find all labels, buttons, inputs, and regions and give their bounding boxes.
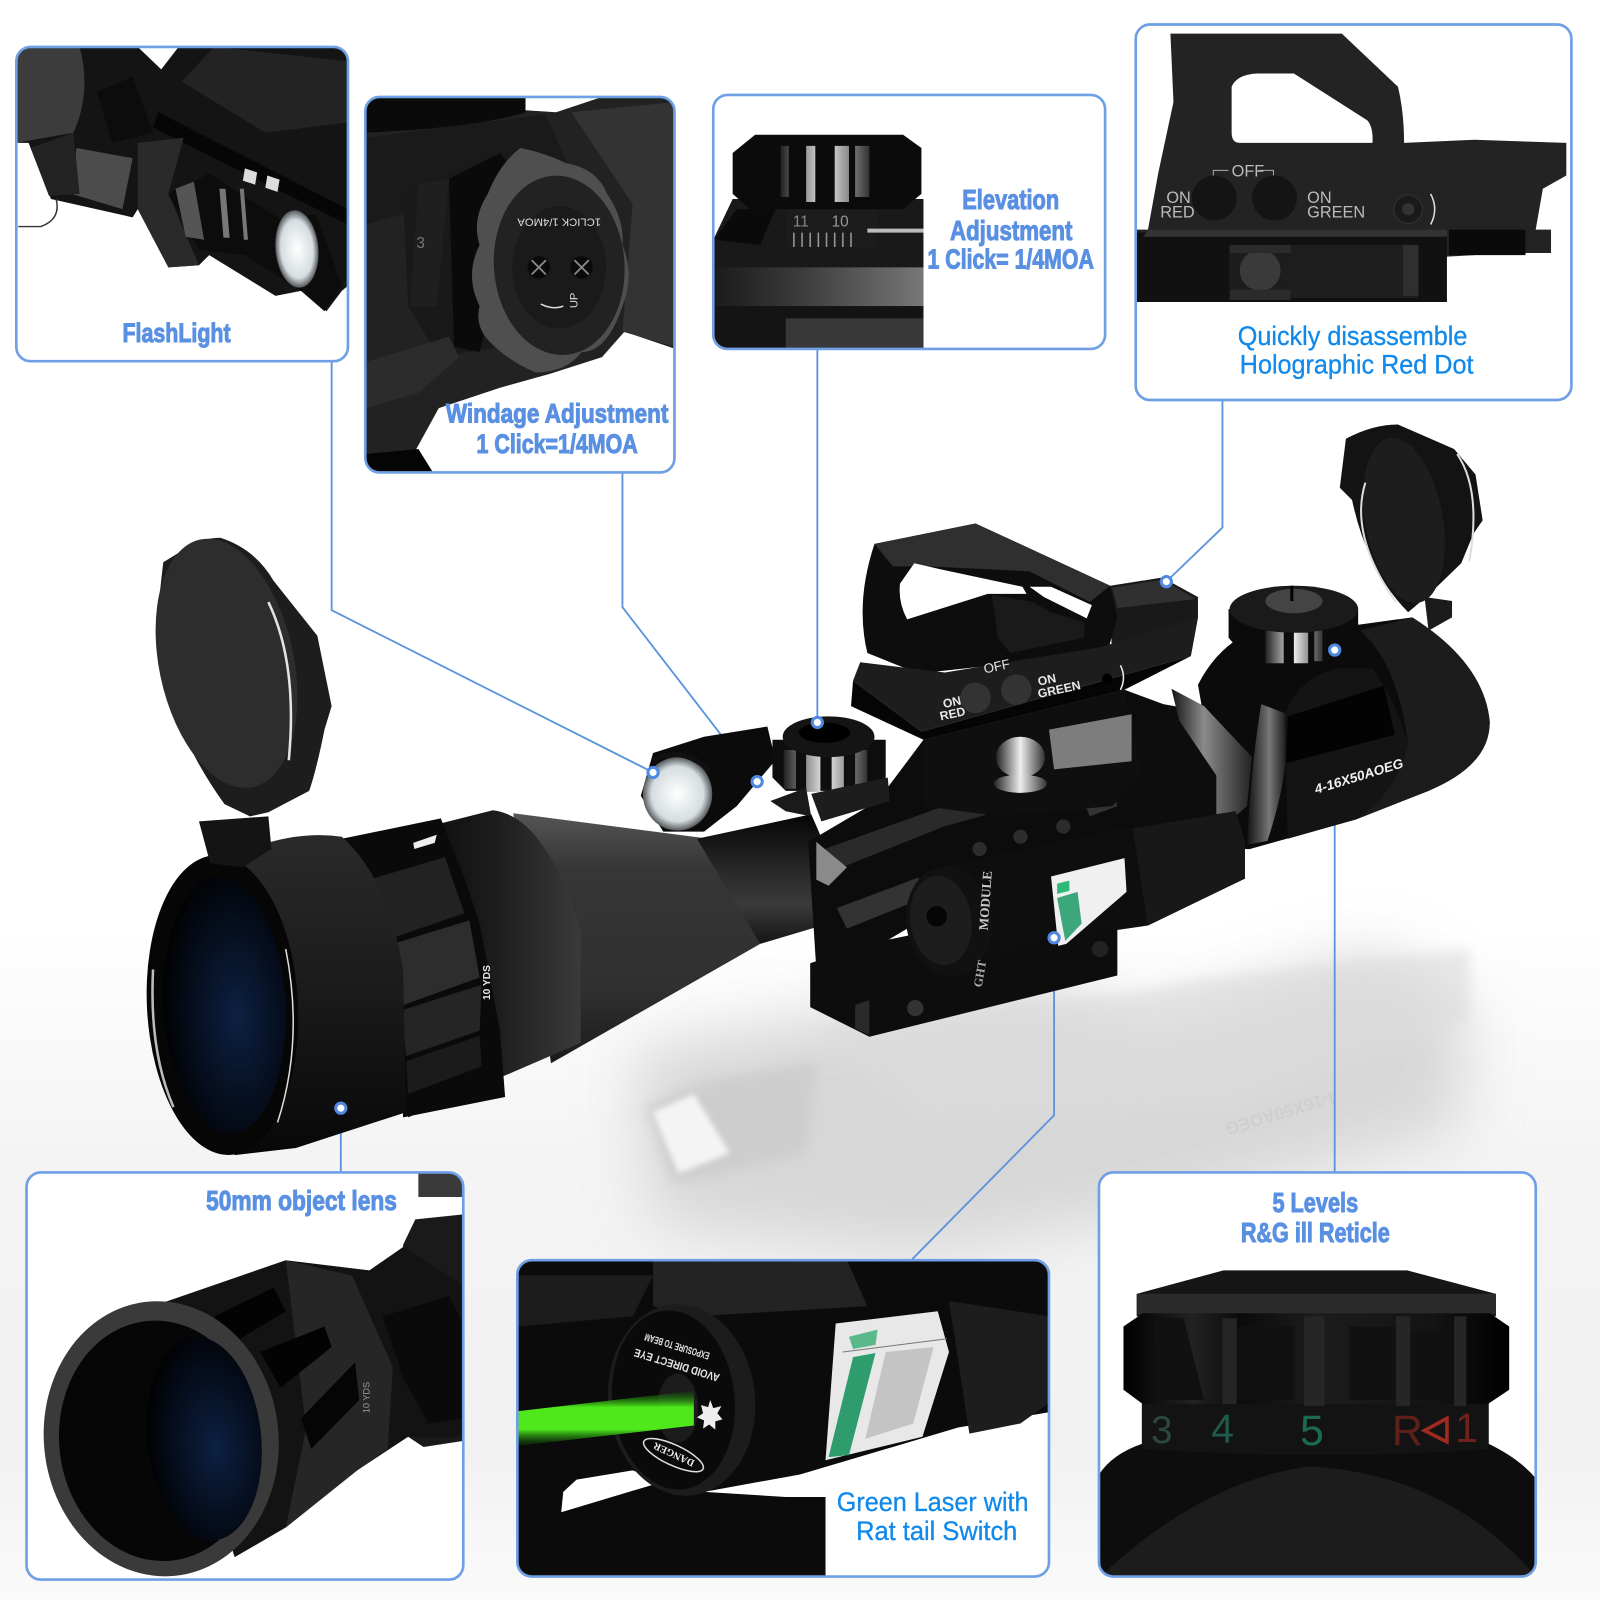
eyepiece: 4-16X50AOEG	[1312, 756, 1405, 797]
main rifle scope	[134, 424, 1490, 1159]
heading: 5 levels reticle: R&G ill Reticle	[1241, 1217, 1390, 1248]
heading: 5 levels reticle	[1241, 1187, 1390, 1248]
objective lens	[139, 851, 306, 1159]
panel: 5 levels reticle	[1099, 1172, 1537, 1578]
heading: elevation adjustment: 1 Click= 1/4MOA	[928, 243, 1094, 274]
red dot sight: ON	[942, 694, 963, 711]
panel: 50mm object lens	[27, 1172, 464, 1588]
heading: 50mm object lens: 50mm object lens	[206, 1185, 397, 1216]
heading: windage adjustment: 1 Click=1/4MOA	[477, 429, 638, 459]
rail block	[808, 690, 1237, 969]
eyepiece	[1198, 617, 1490, 849]
panel: holographic red dot	[1136, 24, 1571, 400]
panel: 50mm object lens: 10 YDS	[361, 1382, 371, 1413]
heading: windage adjustment: Windage Adjustment	[446, 398, 669, 428]
panel: windage adjustment: 1CLICK 1/4MOA	[517, 215, 601, 227]
panel: elevation adjustment: 10	[832, 214, 849, 231]
panel: green laser	[517, 1260, 1049, 1577]
objective band	[408, 810, 581, 1117]
heading: elevation adjustment: Elevation	[962, 184, 1059, 215]
heading: holographic red dot	[1238, 321, 1474, 379]
adjustable ring ribs	[342, 818, 505, 1117]
panel: flashlight	[16, 47, 348, 361]
panel: holographic red dot: ON	[1166, 189, 1191, 207]
panel: green laser: AVOID DIRECT EYE	[632, 1346, 721, 1383]
background with floor reflection: 4-16X50AOEG	[1223, 1086, 1340, 1139]
panel: holographic red dot: RED	[1160, 203, 1195, 221]
heading: green laser: Rat tail Switch	[856, 1516, 1017, 1546]
panel: windage adjustment: 3	[416, 235, 425, 252]
anchor dots	[336, 577, 1340, 1113]
red dot sight: GREEN	[1036, 678, 1082, 701]
panel: holographic red dot: ON	[1307, 189, 1332, 207]
panel: 5 levels reticle: R	[1392, 1407, 1423, 1455]
heading: windage adjustment	[446, 398, 669, 459]
adjustable ring ribs: 10 YDS	[482, 965, 493, 1000]
laser module: MODULE	[976, 870, 995, 931]
textured objective hood	[230, 835, 406, 1155]
red dot sight: RED	[939, 704, 967, 723]
eyepiece cover lid	[1340, 424, 1483, 631]
panel: green laser: EXPOSURE TO BEAM	[643, 1331, 711, 1361]
panel: green laser: DANGER	[651, 1439, 696, 1468]
flashlight behind the scope	[641, 727, 776, 832]
panel: windage adjustment	[365, 97, 676, 473]
panel: 5 levels reticle: 4	[1211, 1406, 1234, 1452]
heading: 5 levels reticle: 5 Levels	[1272, 1187, 1358, 1218]
heading: elevation adjustment	[928, 184, 1094, 274]
heading: FlashLight: FlashLight	[122, 318, 231, 348]
heading: green laser	[837, 1487, 1029, 1546]
panel: holographic red dot: OFF	[1232, 163, 1264, 181]
heading: green laser: Green Laser with	[837, 1487, 1029, 1517]
leader lines	[332, 350, 1335, 1259]
panel: 5 levels reticle: 3	[1151, 1409, 1173, 1452]
objective taper	[513, 813, 760, 1063]
red dot sight	[851, 523, 1198, 740]
eyepiece adjustment ring	[1117, 689, 1252, 852]
elevation knob	[770, 716, 890, 821]
quick release lever and ball	[923, 690, 1141, 816]
red dot sight: OFF	[982, 656, 1011, 676]
panel: elevation adjustment	[713, 95, 1105, 349]
knob face with scalloped edge	[472, 148, 629, 372]
objective lens cover lid	[134, 525, 332, 816]
heading: holographic red dot: Quickly disassemble	[1238, 321, 1467, 351]
heading: holographic red dot: Holographic Red Dot	[1240, 349, 1474, 379]
laser module	[899, 811, 1245, 988]
panel: elevation adjustment: 11	[793, 214, 809, 231]
panel: holographic red dot: GREEN	[1307, 203, 1365, 221]
laser module: GHT	[971, 959, 989, 988]
heading: elevation adjustment: Adjustment	[950, 215, 1072, 246]
scope tube	[697, 814, 839, 944]
illumination reticle knob	[1229, 586, 1358, 668]
lid hinge	[199, 816, 271, 867]
panel: windage adjustment: UP	[569, 293, 581, 308]
panel: 5 levels reticle: 5	[1300, 1407, 1324, 1455]
mount rail under laser	[810, 893, 1117, 1037]
red dot sight: ON	[1036, 671, 1058, 689]
panel: 5 levels reticle: 1	[1455, 1405, 1478, 1451]
